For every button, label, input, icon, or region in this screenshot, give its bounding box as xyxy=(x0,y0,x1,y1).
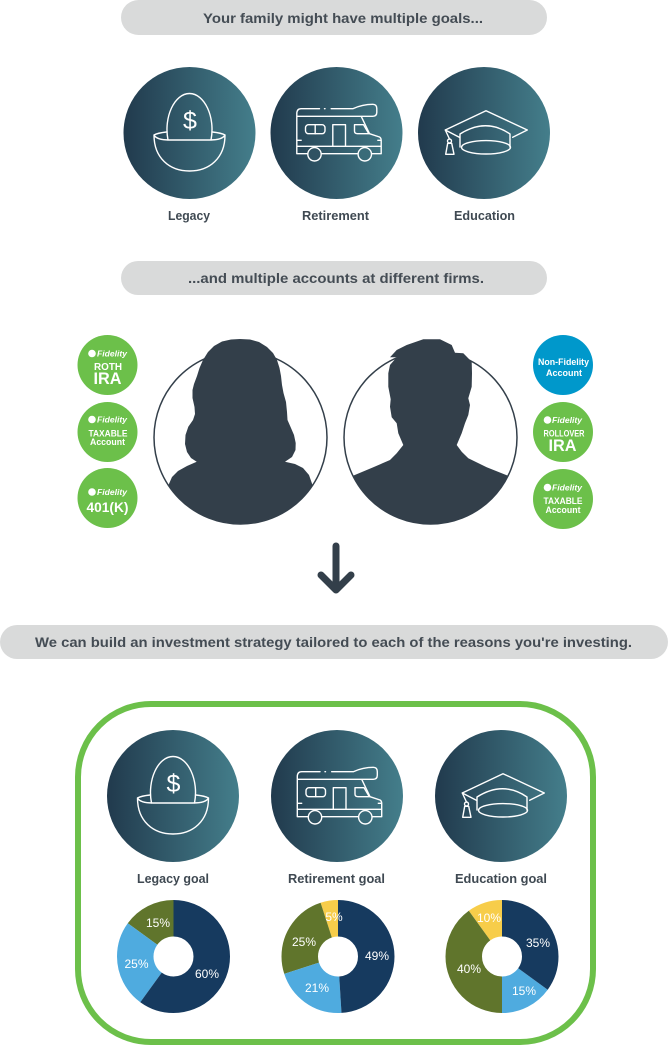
chart: education allocation donut: 40% xyxy=(457,962,481,976)
chart: education allocation donut xyxy=(457,911,550,998)
badge: non-Fidelity account: Non-Fidelity xyxy=(538,357,590,368)
heading: multiple goals xyxy=(121,0,547,35)
icon: legacy egg xyxy=(124,67,256,199)
badge: Fidelity taxable account (right) xyxy=(533,469,593,529)
badge: Fidelity rollover IRA: Fidelity xyxy=(552,416,583,425)
heading: multiple goals: Your family might have multiple goals... xyxy=(203,10,483,26)
label: legacy: Legacy xyxy=(168,208,211,223)
label: retirement: Retirement xyxy=(302,208,370,223)
chart: legacy allocation donut: 60% xyxy=(195,967,219,981)
icon: legacy egg: $ xyxy=(183,107,197,135)
heading: tailored strategy xyxy=(0,625,668,659)
icon: woman silhouette xyxy=(154,339,327,524)
badge: Fidelity Roth IRA: Fidelity xyxy=(97,350,128,358)
label: legacy goal: Legacy goal xyxy=(137,871,209,886)
icon: legacy egg (goal) xyxy=(107,730,239,862)
badge: Fidelity taxable account (right): Account xyxy=(546,505,581,516)
chart: retirement allocation donut xyxy=(292,910,389,995)
badge: Fidelity taxable account xyxy=(78,402,138,462)
chart: education allocation donut: 15% xyxy=(512,984,536,998)
badge: Fidelity rollover IRA: ROLLOVER xyxy=(544,428,585,440)
badge: Fidelity Roth IRA xyxy=(78,335,138,395)
heading: multiple accounts xyxy=(121,261,547,295)
badge: Fidelity 401(k): Fidelity xyxy=(97,488,128,497)
panel: goal strategies xyxy=(78,704,593,1042)
badge: Fidelity taxable account: Account xyxy=(90,437,126,448)
heading: multiple accounts: ...and multiple accounts at different firms. xyxy=(188,270,484,286)
icon: education cap xyxy=(418,67,550,199)
chart: legacy allocation donut xyxy=(124,916,219,995)
badge: Fidelity Roth IRA: IRA xyxy=(94,370,122,388)
icon: retirement RV (goal) xyxy=(271,730,403,862)
chart: education allocation donut: 35% xyxy=(526,936,550,950)
label: retirement goal: Retirement goal xyxy=(288,871,385,886)
chart: retirement allocation donut: 49% xyxy=(365,949,389,963)
label: education goal: Education goal xyxy=(455,871,547,886)
chart: retirement allocation donut: 21% xyxy=(305,981,329,995)
badge: Fidelity taxable account: TAXABLE xyxy=(88,428,128,440)
icon: man silhouette xyxy=(344,339,517,524)
badge: Fidelity rollover IRA: IRA xyxy=(548,437,577,455)
heading: tailored strategy: We can build an investment strategy tailored to each of the reasons you're investing. xyxy=(35,634,632,650)
icon: retirement RV xyxy=(270,67,402,199)
badge: non-Fidelity account: Account xyxy=(546,368,583,379)
label: education: Education xyxy=(454,208,515,223)
badge: Fidelity Roth IRA: ROTH xyxy=(94,361,122,373)
badge: Fidelity taxable account: Fidelity xyxy=(97,416,128,424)
badge: non-Fidelity account xyxy=(533,335,593,395)
badge: Fidelity rollover IRA xyxy=(533,402,593,462)
badge: Fidelity taxable account (right): TAXABLE xyxy=(544,496,582,507)
chart: retirement allocation donut: 25% xyxy=(292,935,316,949)
badge: Fidelity 401(k) xyxy=(78,468,138,528)
icon: legacy egg (goal): $ xyxy=(167,770,181,798)
chart: education allocation donut: 10% xyxy=(477,911,501,925)
icon: education cap (goal) xyxy=(435,730,567,862)
badge: Fidelity 401(k): 401(K) xyxy=(86,499,128,515)
arrow: down xyxy=(321,546,351,590)
chart: retirement allocation donut: 5% xyxy=(325,910,343,924)
chart: legacy allocation donut: 25% xyxy=(124,957,149,971)
chart: legacy allocation donut: 15% xyxy=(146,916,170,930)
badge: Fidelity taxable account (right): Fidelity xyxy=(552,484,583,492)
